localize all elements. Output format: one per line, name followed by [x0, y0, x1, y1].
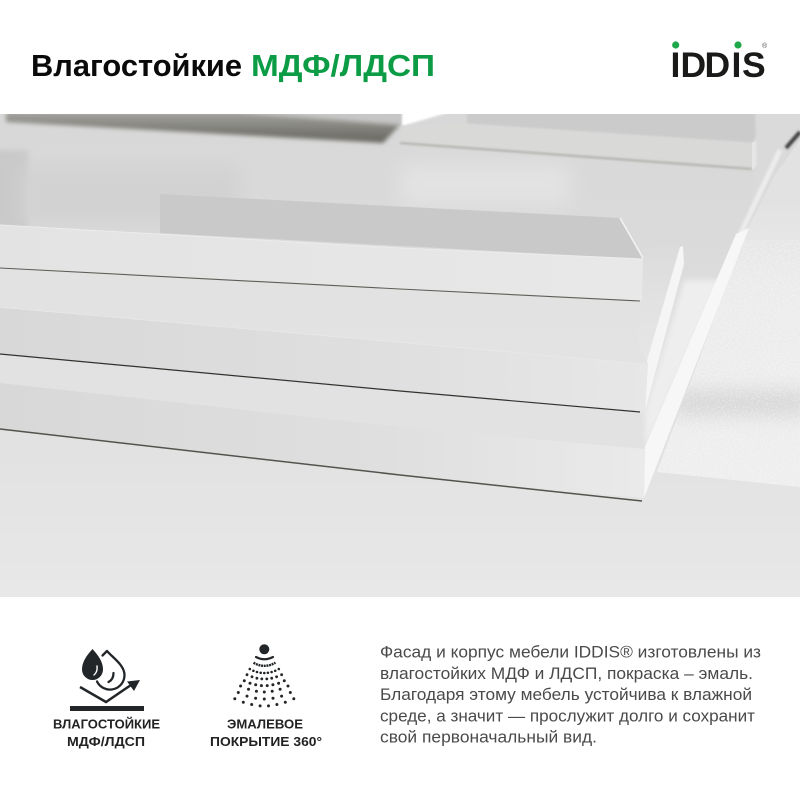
logo: IDDIS: IDDIS [670, 45, 766, 85]
bottom board side edge [644, 228, 749, 498]
bottom board front face [0, 397, 644, 455]
title [31, 48, 435, 83]
header background [0, 0, 800, 114]
third board dark seam [0, 354, 640, 412]
description text: Фасад и корпус мебели IDDIS® изготовлены из [380, 642, 761, 662]
description text [380, 642, 761, 746]
label: enamel coating: ЭМАЛЕВОЕ [227, 718, 303, 732]
description text: среде, а значит — прослужит долго и сохранит [380, 706, 755, 726]
right background wall [756, 114, 768, 142]
third board front face [645, 364, 648, 407]
top board top surface [160, 194, 643, 259]
label: enamel coating [210, 718, 322, 749]
icon: rising arrow [80, 680, 140, 702]
icon: enamel spray [233, 644, 295, 707]
second board front face [646, 362, 648, 364]
description text: свой первоначальный вид. [380, 728, 597, 746]
bottom board top surface [646, 280, 716, 438]
third board top surface [638, 246, 682, 363]
top board side bevel [620, 218, 643, 258]
description text: влагостойких МДФ и ЛДСП, покраска – эмаль. [380, 664, 753, 683]
photo: stacked white boards [0, 112, 800, 597]
label: moisture resistant [53, 716, 160, 749]
label: enamel coating: ПОКРЫТИЕ 360° [210, 735, 322, 749]
label: moisture resistant: ВЛАГОСТОЙКИЕ [53, 716, 160, 732]
icon: moisture resistant [70, 649, 144, 711]
icon: base bar [70, 706, 144, 711]
wall edge highlight and dark mark [740, 132, 800, 235]
top board dark seam [0, 268, 640, 301]
foam underlay [657, 130, 800, 487]
background board left with shadow [6, 112, 450, 143]
icon: outlined drop [97, 651, 125, 690]
icon: filled drop [82, 649, 103, 680]
bottom board shadow line [0, 429, 642, 501]
background board right [400, 112, 770, 170]
description text: Благодаря этому мебель устойчива к влажной [380, 685, 752, 704]
label: moisture resistant: МДФ/ЛДСП [67, 735, 145, 749]
logo: IDDIS: ® [762, 42, 768, 50]
title: МДФ/ЛДСП [251, 48, 435, 83]
third board side edge [645, 246, 684, 411]
top board front face [0, 225, 643, 301]
background tonal patches [0, 150, 570, 230]
title: Влагостойкие [31, 48, 242, 83]
